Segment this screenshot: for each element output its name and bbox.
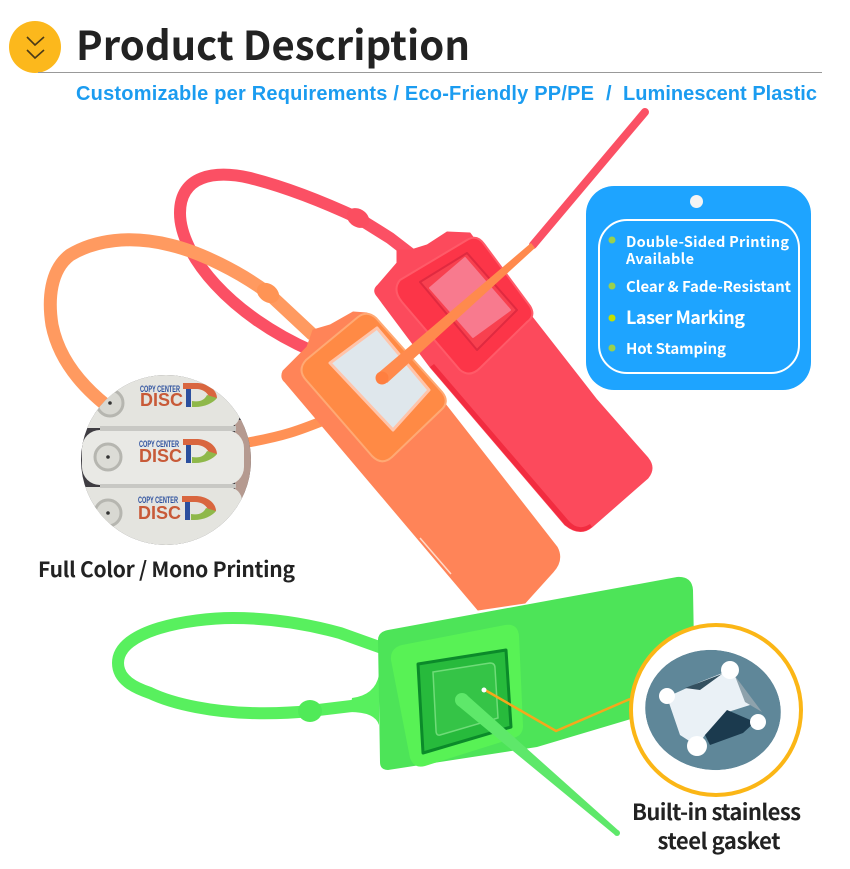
title: Product Description xyxy=(76,14,470,72)
subtitle xyxy=(76,83,817,105)
panel: features card xyxy=(586,186,811,390)
panel: printing sample circle xyxy=(81,375,251,545)
panel: gasket detail circle xyxy=(631,625,801,795)
caption: gasket: steel gasket xyxy=(658,824,780,856)
panel: features card: Available xyxy=(625,248,694,269)
panel: printing sample circle: DISC xyxy=(138,503,181,523)
orange seal tag xyxy=(50,240,560,610)
caption: printing: Full Color / Mono Printing xyxy=(38,554,295,584)
panel: printing sample circle: COPY CENTER xyxy=(140,384,180,394)
panel: printing sample circle: DISC xyxy=(139,446,182,466)
panel: printing sample circle: DISC xyxy=(140,390,183,410)
subtitle: Luminescent Plastic xyxy=(623,83,817,105)
leader dot xyxy=(482,688,486,692)
panel: features card: Laser Marking xyxy=(626,304,745,330)
panel: printing sample circle: COPY CENTER xyxy=(139,439,179,449)
header rule xyxy=(38,72,822,73)
green seal tag xyxy=(118,577,695,836)
subtitle: Customizable per Requirements / Eco-Friendly PP/PE xyxy=(76,83,594,105)
icon: yellow chevron badge xyxy=(9,21,61,73)
subtitle: / xyxy=(606,83,612,105)
red seal tag xyxy=(180,112,652,532)
panel: printing sample circle: COPY CENTER xyxy=(138,495,178,505)
panel: features card: Clear & Fade-Resistant xyxy=(626,276,792,297)
caption: gasket xyxy=(632,795,801,856)
callout leader line xyxy=(485,690,630,731)
caption: gasket: Built-in stainless xyxy=(632,795,801,827)
panel: features card: Hot Stamping xyxy=(626,338,726,359)
panel: features card: Double-Sided Printing xyxy=(626,231,789,252)
